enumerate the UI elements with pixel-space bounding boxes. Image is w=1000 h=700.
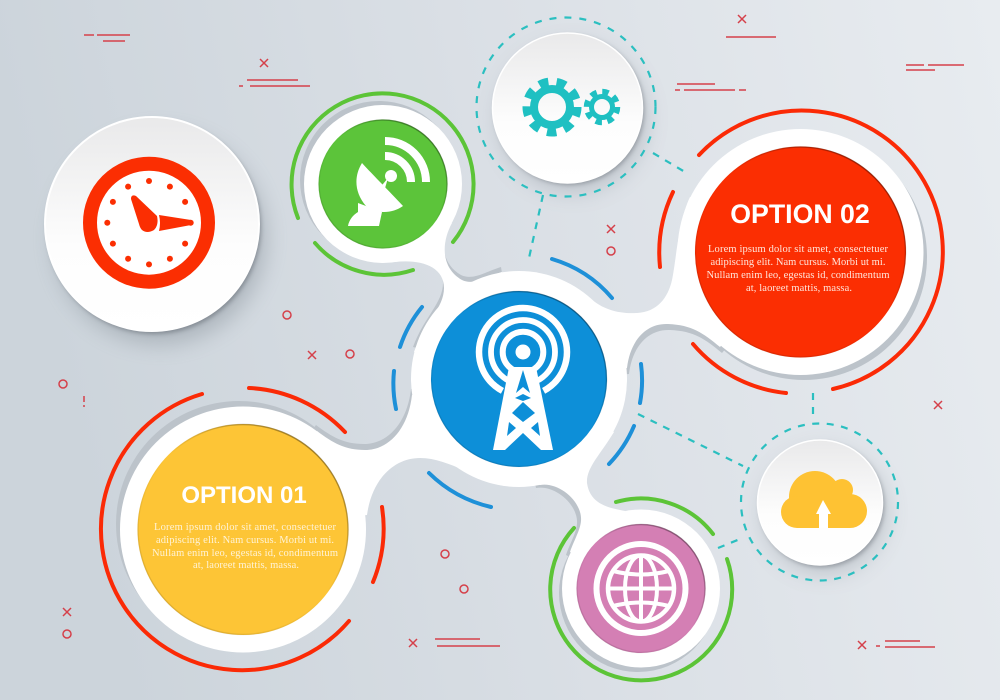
blue arcs around center	[393, 259, 642, 507]
satellite node	[318, 120, 448, 248]
white network shadow	[116, 101, 927, 672]
heading: option 01: OPTION 01	[181, 482, 307, 509]
icon: gears	[526, 82, 618, 132]
gears node	[476, 18, 656, 196]
body text: option 01: at, laoreet mattis, massa.	[193, 560, 299, 571]
body text: option 01: Lorem ipsum dolor sit amet, consectetuer	[154, 522, 336, 533]
heading: option 02: OPTION 02	[730, 199, 870, 229]
body text: option 01	[152, 522, 338, 571]
icon: satellite dish	[348, 141, 426, 226]
body text: option 01: adipiscing elit. Nam cursus. Morbi ut mi.	[156, 535, 334, 546]
white network	[120, 105, 924, 668]
center tower node	[431, 291, 607, 467]
body text: option 01: Nullam enim leo, egestas id, condimentum	[152, 548, 338, 559]
red arcs around option 02	[659, 110, 943, 393]
icon: cloud upload	[781, 471, 867, 528]
dashed ring: gears	[476, 18, 656, 196]
dashed ring: cloud	[741, 424, 898, 580]
icon: broadcast tower	[479, 308, 567, 450]
red arcs around option 01	[101, 388, 384, 670]
body text: option 02	[706, 244, 890, 294]
icon: globe	[596, 544, 686, 633]
teal dashed connectors	[529, 153, 813, 548]
icon: clock	[90, 164, 208, 282]
body text: option 02: at, laoreet mattis, massa.	[746, 283, 852, 294]
body text: option 02: Nullam enim leo, egestas id, condimentum	[706, 270, 890, 281]
globe node	[576, 524, 706, 653]
body text: option 02: adipiscing elit. Nam cursus. Morbi ut mi.	[710, 257, 886, 268]
clock node	[45, 117, 266, 344]
option 02 panel	[695, 146, 906, 358]
green arcs around globe node	[550, 499, 732, 680]
option 01 panel	[138, 424, 348, 635]
body text: option 02: Lorem ipsum dolor sit amet, consectetuer	[708, 244, 888, 255]
green arcs around satellite node	[292, 93, 474, 275]
cloud node	[741, 424, 898, 580]
